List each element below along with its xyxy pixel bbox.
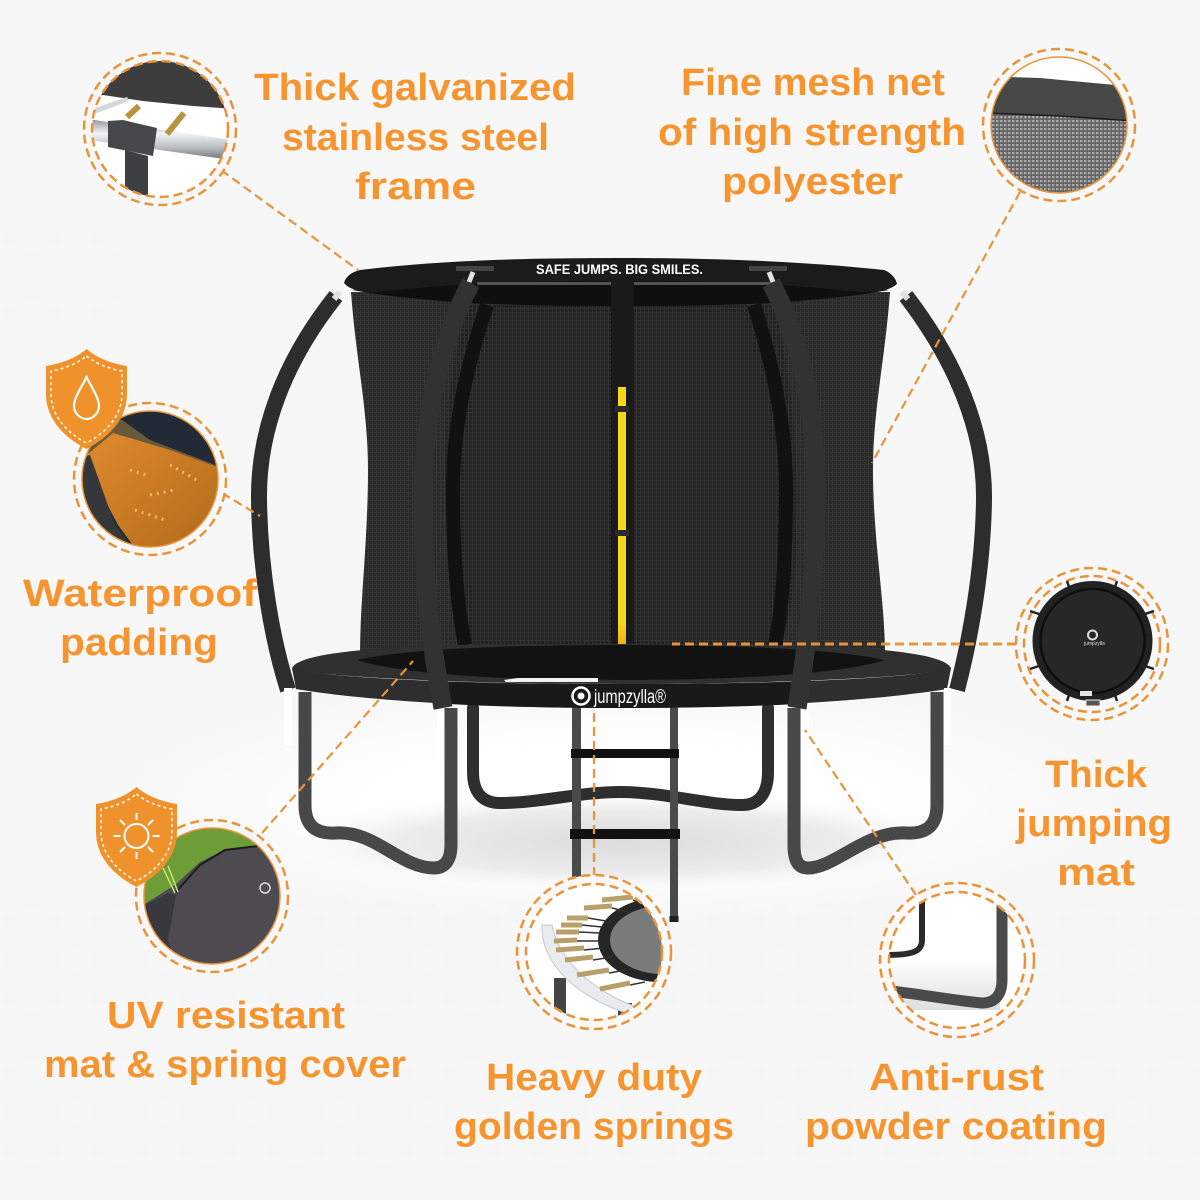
ladder	[570, 706, 680, 922]
back legs	[473, 708, 768, 805]
detail: UV resistant cover	[136, 820, 288, 972]
label: steel frame: stainless steel	[282, 117, 549, 159]
label: fine mesh: of high strength	[658, 112, 966, 154]
front padded poles	[423, 272, 816, 708]
detail: anti-rust legs	[880, 883, 1034, 1037]
leg spring covers	[284, 688, 951, 773]
detail: waterproof padding	[74, 403, 226, 555]
safety net	[351, 278, 890, 655]
label: steel frame: Thick galvanized	[254, 67, 576, 109]
detail: jumping mat: jumpzylla	[1083, 641, 1105, 647]
label: jumping mat: Thick	[1045, 754, 1148, 796]
slogan: SAFE JUMPS. BIG SMILES.	[536, 261, 703, 277]
ground shadow	[100, 680, 1140, 920]
detail: jumping mat	[1016, 568, 1168, 720]
jumpzylla logo: jumpzylla®	[593, 687, 666, 708]
icon: UV shield	[96, 787, 288, 972]
label: UV resistant: UV resistant	[107, 995, 345, 1037]
label: waterproof padding: padding	[60, 622, 218, 664]
leader lines	[221, 170, 1020, 895]
trampoline	[259, 258, 984, 922]
detail: golden springs	[516, 874, 672, 1030]
label: waterproof padding: Waterproof	[23, 573, 257, 615]
label: jumping mat: jumping	[1015, 803, 1172, 845]
label: anti-rust: powder coating	[805, 1106, 1107, 1148]
outer padded arcs	[259, 292, 984, 690]
label: golden springs: golden springs	[454, 1106, 734, 1148]
detail: fine mesh	[983, 49, 1135, 201]
front legs	[305, 692, 937, 868]
label: fine mesh: polyester	[722, 161, 903, 203]
mat pad top	[292, 644, 951, 684]
detail: steel frame	[84, 50, 236, 205]
top ring with slogan	[344, 258, 897, 292]
label: UV resistant: mat & spring cover	[44, 1044, 406, 1086]
label: jumping mat: mat	[1057, 852, 1135, 894]
pad skirt	[292, 668, 951, 708]
label: fine mesh: Fine mesh net	[681, 62, 945, 104]
label: anti-rust: Anti-rust	[869, 1057, 1044, 1099]
label: golden springs: Heavy duty	[486, 1057, 702, 1099]
jumpzylla logo	[572, 687, 666, 708]
label: steel frame: frame	[355, 166, 476, 208]
centre strap and yellow pole	[611, 280, 634, 675]
icon: waterproof shield	[46, 349, 226, 555]
